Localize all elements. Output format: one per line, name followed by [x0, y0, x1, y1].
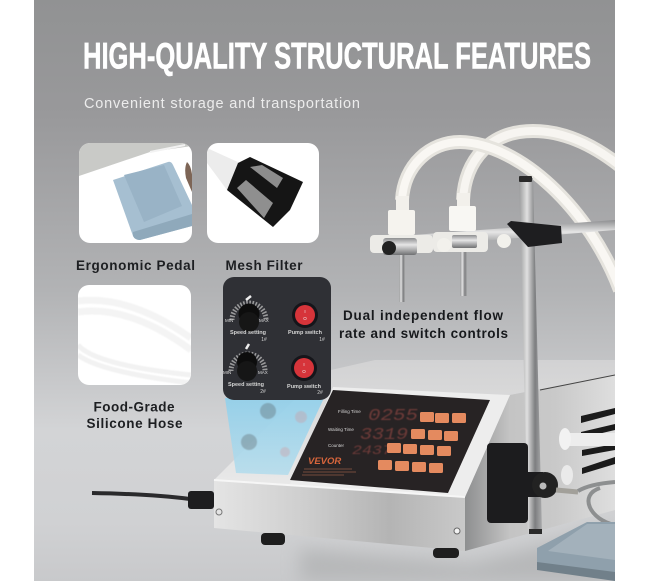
pump switch 1: Pump switch [288, 330, 323, 336]
label: food-grade silicone hose: Food-Grade [94, 400, 175, 414]
display digits: 0255 [368, 407, 418, 426]
speed knob 1: MAX [259, 318, 269, 323]
side fittings [565, 433, 615, 446]
nozzle assembly 2 [433, 193, 511, 296]
pump switch 2: I [303, 362, 305, 367]
label: ergonomic pedal: Ergonomic Pedal [76, 258, 195, 273]
power cable and plug [92, 491, 214, 509]
mounting bracket [487, 443, 558, 523]
faded panel reflection [241, 403, 307, 457]
nozzle assembly 1 [370, 196, 433, 302]
pump switch 1 [288, 302, 325, 343]
speed knob 2: MIN [223, 370, 231, 375]
display labels: Counter [328, 443, 345, 448]
display labels: Filling Time [338, 409, 361, 414]
label: dual controls: Dual independent flow [343, 308, 503, 323]
speed knob 1 [225, 296, 269, 343]
pump switch 1: O [303, 316, 307, 321]
speed knob 1: 1# [261, 337, 267, 343]
speed knob 2 [223, 344, 268, 395]
speed knob 2: Speed setting [228, 382, 264, 388]
machine right side [465, 375, 615, 551]
glow beam under control panel [225, 398, 324, 475]
pump switch 2: Pump switch [287, 384, 322, 390]
pump switch 2 [287, 355, 323, 396]
side vents [581, 408, 615, 474]
VEVOR logo: VEVOR [308, 456, 341, 467]
tubing [402, 131, 625, 290]
pump switch 1: 1# [319, 337, 325, 343]
machine: body [214, 360, 615, 581]
machine front frame [318, 387, 510, 497]
display labels [328, 409, 361, 448]
display fine print [302, 469, 356, 475]
machine lower front [214, 480, 465, 551]
pump switch 2: 2# [317, 390, 323, 396]
display digits [352, 407, 418, 458]
display digits: 2437 [352, 443, 392, 458]
control display [290, 390, 490, 493]
label: dual controls line 2: rate and switch controls [339, 326, 508, 341]
glow edge right [331, 285, 333, 398]
foot left [261, 533, 285, 545]
rod clamp [507, 221, 562, 247]
pole foot [529, 529, 542, 534]
speed knob 1: Speed setting [230, 330, 266, 336]
pump switch 1: I [304, 309, 306, 314]
stand pole [519, 178, 542, 533]
glow edge left [220, 285, 224, 398]
control panel inset [223, 277, 331, 400]
photo card: ergonomic pedal [79, 143, 192, 243]
speed knob 1: MIN [225, 318, 233, 323]
speed knob 2: 2# [260, 389, 266, 395]
floor shadow [298, 538, 608, 581]
screw left [216, 509, 222, 515]
photo card: mesh filter [207, 143, 319, 243]
top seam [540, 375, 615, 390]
label: mesh filter: Mesh Filter [226, 258, 303, 273]
pump switch 2: O [302, 369, 306, 374]
pole cap [519, 176, 532, 182]
display digits: 3319 [360, 426, 408, 445]
photo card: silicone hose [78, 285, 191, 385]
foot pedal and cord [537, 482, 615, 581]
display labels: Waiting Time [328, 427, 354, 432]
label: food-grade silicone hose line 2: Silicone Hose [86, 416, 183, 431]
screw right [454, 528, 460, 534]
machine top face [214, 360, 615, 497]
subtitle: Convenient storage and transportation [84, 96, 360, 112]
orange keys [378, 412, 466, 473]
foot right [433, 548, 459, 558]
speed knob 2: MAX [258, 370, 268, 375]
horizontal rod [414, 220, 615, 240]
